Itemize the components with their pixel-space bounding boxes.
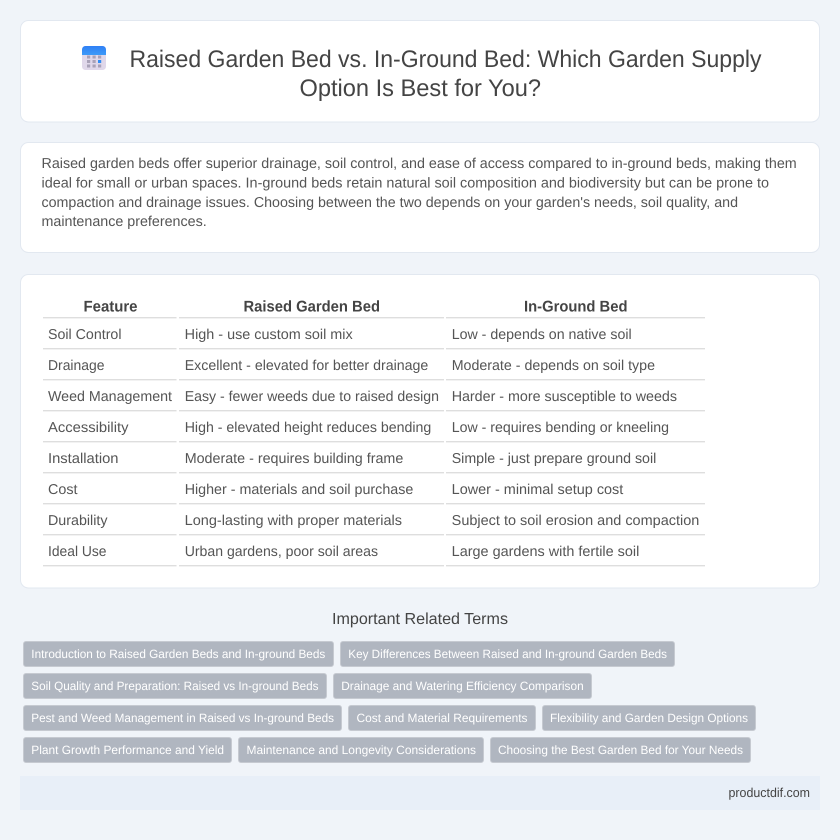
row: weed management: Harder - more susceptible to weeds [452, 389, 677, 405]
tag: flexibility: Flexibility and Garden Design Options [550, 711, 748, 725]
row: durability: Subject to soil erosion and compaction [452, 513, 699, 529]
row: ideal use: Large gardens with fertile soil [452, 544, 639, 560]
row: soil control: Low - depends on native soil [452, 327, 632, 343]
row: durability [43, 513, 705, 535]
tag list: related terms [24, 642, 756, 762]
table header row: Feature [84, 298, 138, 316]
row: accessibility [43, 420, 705, 442]
tag: pest and weed: Pest and Weed Management in Raised vs In-ground Beds [31, 711, 334, 725]
icon: calendar [82, 46, 106, 70]
row: drainage: Moderate - depends on soil type [452, 358, 655, 374]
tag: maintenance: Maintenance and Longevity Considerations [246, 743, 476, 757]
footer band [20, 776, 820, 810]
row: weed management: Easy - fewer weeds due to raised design [185, 389, 439, 405]
row: ideal use [43, 544, 705, 566]
tag: choosing the best [490, 738, 750, 762]
panel: summary paragraph [20, 142, 820, 252]
row: drainage: Drainage [48, 358, 105, 374]
row: soil control: High - use custom soil mix [185, 327, 353, 343]
text block: summary: Raised garden beds offer superior drainage, soil control, and ease of access compared to in-ground beds, making them [42, 156, 797, 172]
tag: soil quality: Soil Quality and Preparation: Raised vs In-ground Beds [31, 679, 319, 693]
tag: introduction [24, 642, 334, 666]
row: installation [43, 451, 705, 473]
row: installation: Moderate - requires building frame [185, 451, 403, 467]
row: drainage: Excellent - elevated for better drainage [185, 358, 428, 374]
row: cost: Lower - minimal setup cost [452, 482, 623, 498]
row: cost: Higher - materials and soil purchase [185, 482, 413, 498]
title: Option Is Best for You? [300, 75, 541, 102]
tag: key differences: Key Differences Between Raised and In-ground Garden Beds [348, 647, 667, 661]
row: accessibility: Accessibility [48, 420, 129, 436]
tag: cost and material: Cost and Material Requirements [356, 711, 528, 725]
row: installation: Simple - just prepare ground soil [452, 451, 656, 467]
tag: introduction: Introduction to Raised Garden Beds and In-ground Beds [31, 647, 325, 661]
tag: flexibility [542, 706, 756, 730]
text block: summary: maintenance preferences. [42, 214, 207, 230]
tag: drainage and watering [334, 674, 592, 698]
footer source text: productdif.com [728, 785, 810, 800]
table header row: In-Ground Bed [524, 298, 628, 316]
table header row [43, 298, 705, 318]
row: soil control [43, 327, 705, 349]
row: durability: Durability [48, 513, 108, 529]
table header row: Raised Garden Bed [244, 298, 380, 316]
text block: summary: ideal for small or urban spaces. In-ground beds retain natural soil composition and biodiversity but can be prone to [42, 176, 769, 192]
row: ideal use: Ideal Use [48, 544, 107, 560]
row: durability: Long-lasting with proper materials [185, 513, 402, 529]
row: accessibility: Low - requires bending or kneeling [452, 420, 669, 436]
row: ideal use: Urban gardens, poor soil areas [185, 544, 378, 560]
tag: pest and weed [24, 706, 342, 730]
tag: plant growth [24, 738, 232, 762]
row: soil control: Soil Control [48, 327, 122, 343]
tag: plant growth: Plant Growth Performance and Yield [31, 743, 224, 757]
tag: soil quality [24, 674, 326, 698]
tag: maintenance [238, 738, 484, 762]
tag: drainage and watering: Drainage and Watering Efficiency Comparison [341, 679, 584, 693]
row: accessibility: High - elevated height reduces bending [185, 420, 431, 436]
row: drainage [43, 358, 705, 380]
panel: comparison table [20, 274, 820, 588]
panel: header [20, 20, 820, 122]
text block: summary: compaction and drainage issues. Choosing between the two depends on your garden's needs, soil quality, and [42, 195, 738, 211]
title: Raised Garden Bed vs. In-Ground Bed: Which Garden Supply [130, 46, 762, 73]
tag: key differences [340, 642, 674, 666]
row: installation: Installation [48, 451, 119, 467]
row: cost [43, 482, 705, 504]
row: weed management: Weed Management [48, 389, 172, 405]
tag: choosing the best: Choosing the Best Garden Bed for Your Needs [498, 743, 743, 757]
row: weed management [43, 389, 705, 411]
tag: cost and material [348, 706, 536, 730]
heading: important related terms: Important Related Terms [332, 611, 508, 628]
row: cost: Cost [48, 482, 78, 498]
